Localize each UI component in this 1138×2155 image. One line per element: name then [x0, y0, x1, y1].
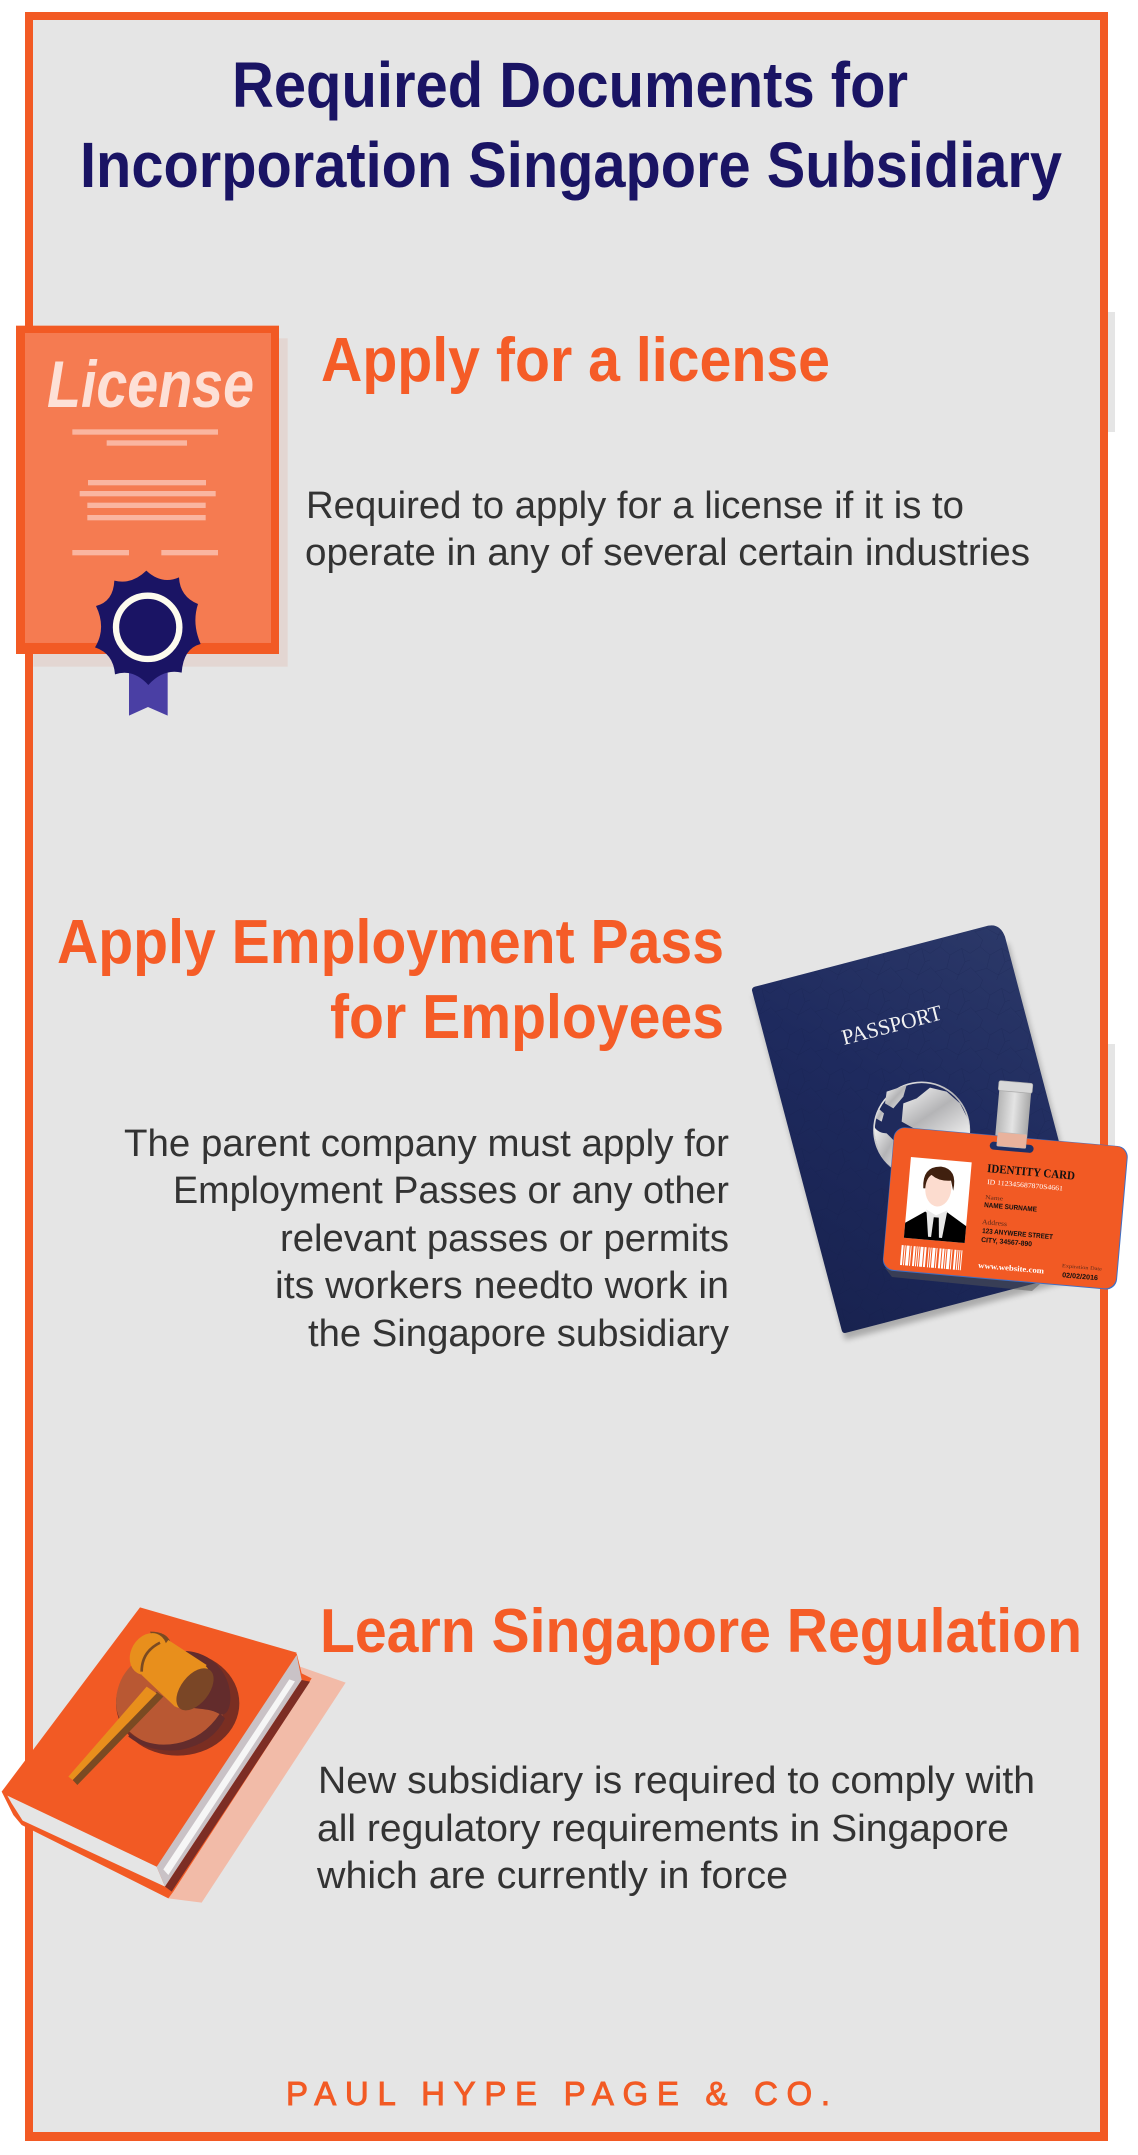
card text: CITY, 34567-890: [981, 1237, 1032, 1248]
heading: learn singapore regulation: Learn Singapore Regulation: [320, 1597, 1082, 1666]
gavel hammer: [68, 1626, 221, 1785]
text: employment pass description: the Singapore subsidiary: [308, 1313, 729, 1355]
card text: 02/02/2016: [1062, 1272, 1098, 1282]
card text: Address: [982, 1218, 1008, 1228]
text: employment pass description: [124, 1123, 729, 1355]
text: license description: operate in any of several certain industries: [305, 532, 1030, 574]
barcode: [901, 1255, 962, 1260]
card text: NAME SURNAME: [984, 1202, 1037, 1214]
footer: company name: PAUL HYPE PAGE & CO.: [286, 2075, 830, 2112]
icon: badge clip: [994, 1081, 1033, 1140]
card text: 123 ANYWERE STREET: [982, 1228, 1054, 1241]
book cover: [2, 1607, 297, 1867]
card text: Name: [985, 1195, 1004, 1203]
heading: apply employment pass: [57, 908, 724, 1052]
icon: passport: [752, 925, 1095, 1340]
card text: Expiration Date: [1062, 1264, 1103, 1273]
text: regulation description: which are currently in force: [316, 1855, 788, 1897]
text: regulation description: [316, 1760, 1035, 1897]
card text: [978, 1161, 1111, 1283]
title: Incorporation Singapore Subsidiary: [80, 129, 1062, 201]
heading: apply for a license: Apply for a license: [321, 326, 830, 395]
icon: ribbon seal: [95, 571, 201, 716]
book back cover: [2, 1653, 312, 1898]
portrait photo: [904, 1157, 972, 1243]
text: regulation description: all regulatory requirements in Singapore: [317, 1808, 1009, 1850]
text: employment pass description: its workers needto work in: [275, 1265, 729, 1307]
text: license description: Required to apply for a license if it is to: [306, 485, 964, 527]
card text: ID 112345687870S4661: [987, 1178, 1064, 1193]
passport label: PASSPORT: [839, 1000, 945, 1050]
title: Required Documents for: [232, 49, 908, 121]
icon: license certificate: [16, 326, 288, 716]
heading: apply employment pass: for Employees: [330, 983, 724, 1052]
text: employment pass description: The parent company must apply for: [124, 1123, 729, 1165]
gavel sound block: [116, 1651, 239, 1756]
icon: law book with gavel: [2, 1607, 346, 1903]
text: employment pass description: Employment Passes or any other: [173, 1170, 729, 1212]
card text: IDENTITY CARD: [987, 1161, 1076, 1183]
title: [80, 49, 1062, 201]
license word: License: [47, 347, 254, 421]
text: regulation description: New subsidiary is required to comply with: [318, 1760, 1035, 1802]
card text: www.website.com: [978, 1261, 1045, 1276]
heading: apply employment pass: Apply Employment Pass: [57, 908, 724, 977]
text: employment pass description: relevant passes or permits: [280, 1218, 729, 1260]
icon: identity card badge: [882, 1081, 1129, 1291]
icon: globe: [874, 1082, 970, 1178]
badge slot: [989, 1141, 1034, 1153]
text: license description: [305, 485, 1030, 574]
